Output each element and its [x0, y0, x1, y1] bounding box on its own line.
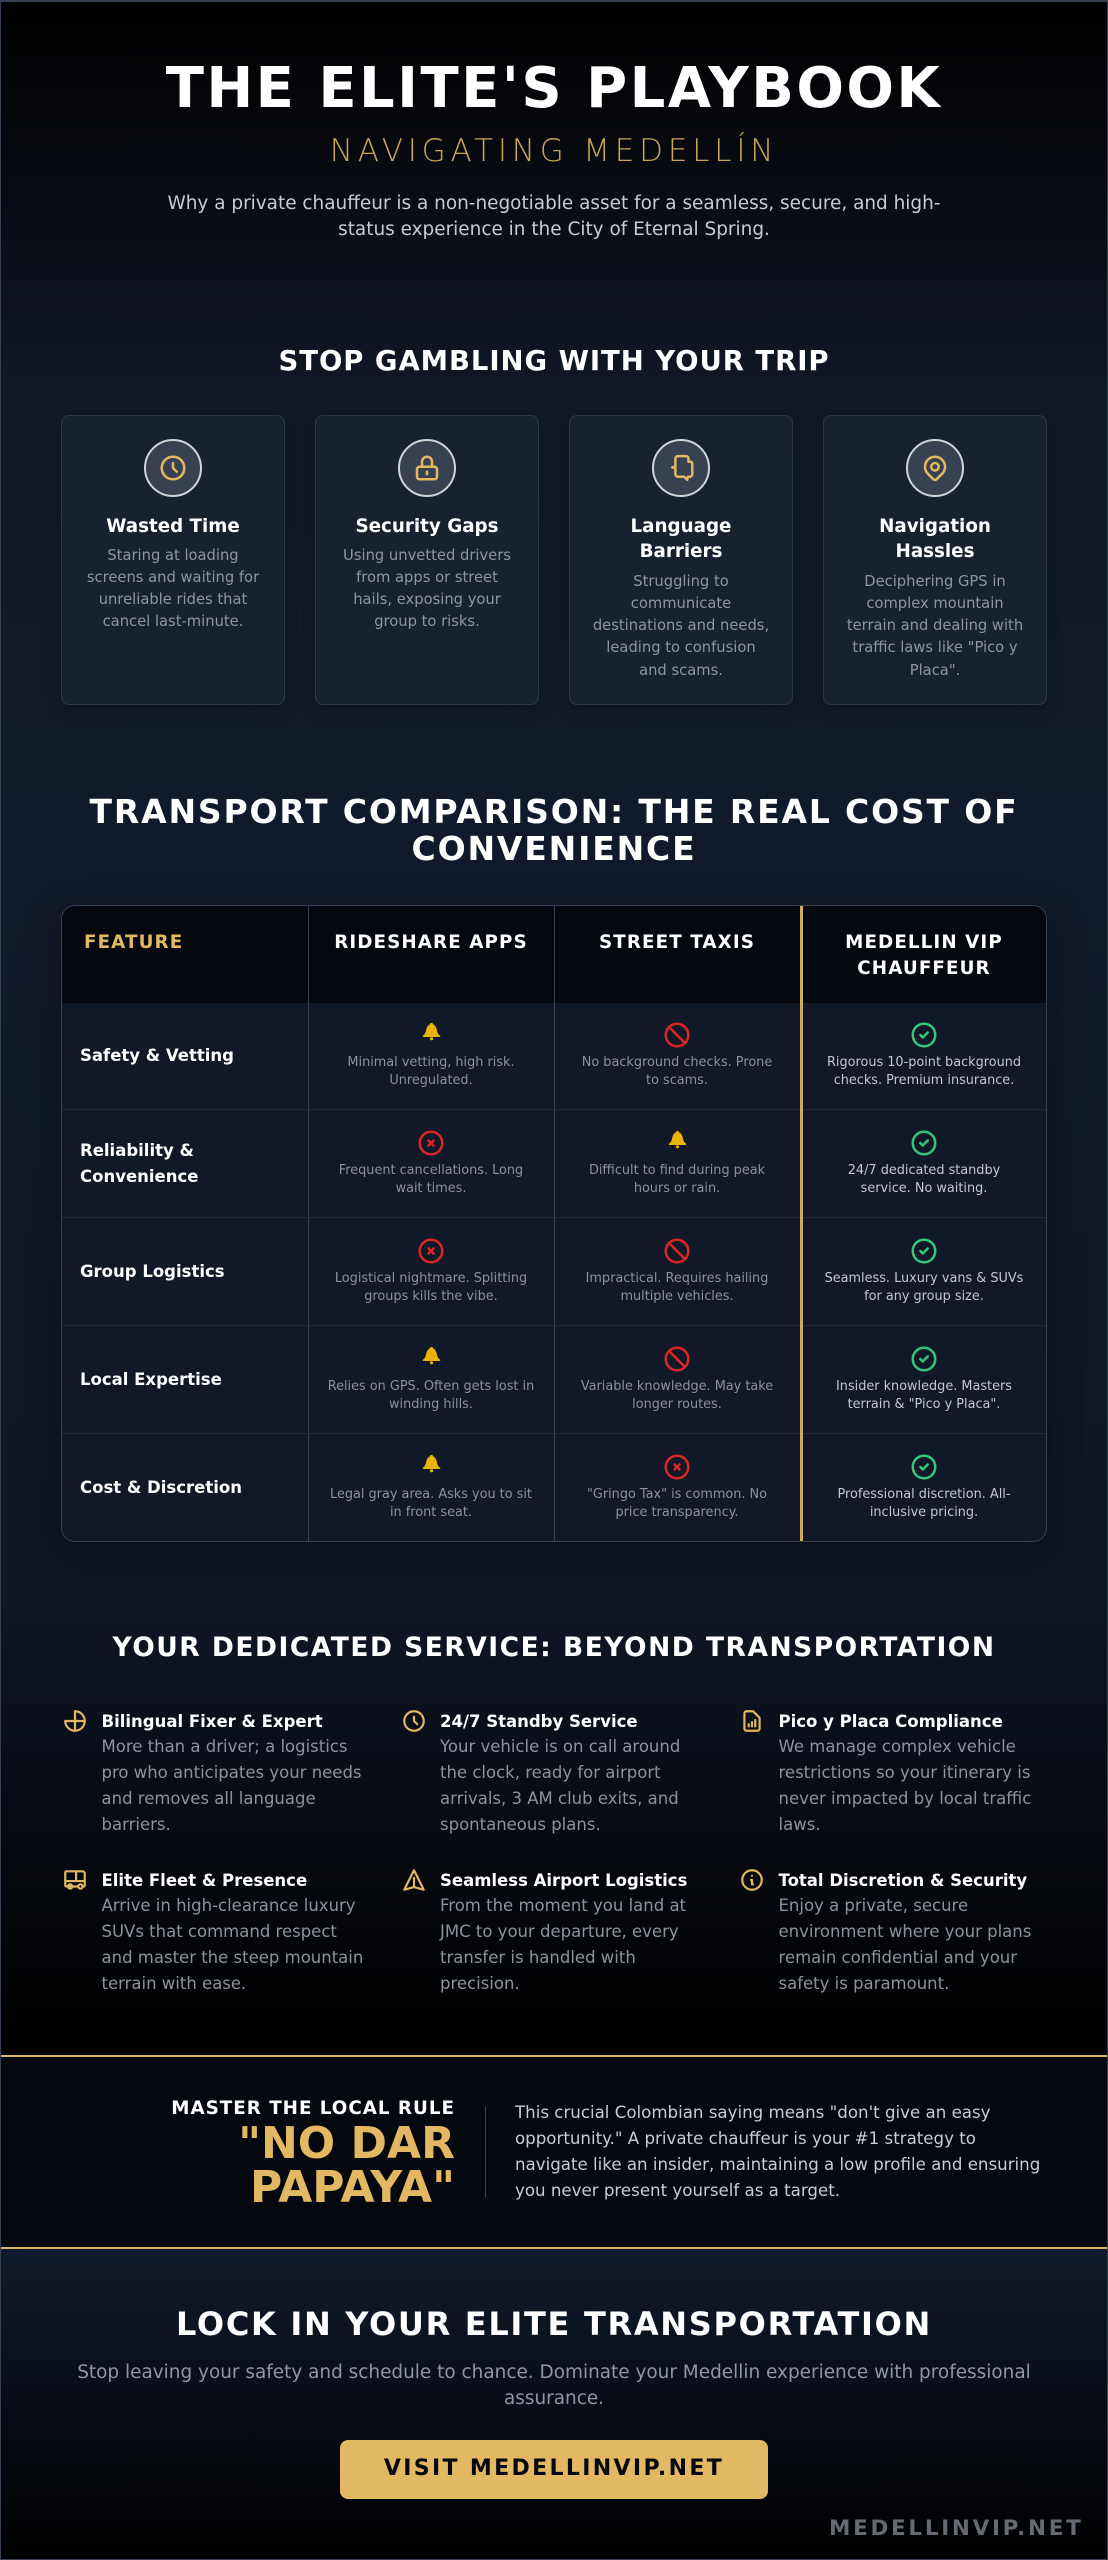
subtitle: NAVIGATING MEDELLÍN — [330, 132, 778, 168]
watermark: MEDELLINVIP.NET — [829, 2516, 1084, 2541]
cell: hours or rain. — [634, 1181, 720, 1196]
cta button: VISIT MEDELLINVIP.NET — [384, 2456, 724, 2481]
cell: Variable knowledge. May take — [581, 1379, 773, 1394]
card text: traffic laws like "Pico y — [852, 639, 1018, 656]
cell: checks. Premium insurance. — [834, 1073, 1014, 1088]
service: airport: JMC to your departure, every — [440, 1922, 679, 1941]
cell: Professional discretion. All- — [838, 1487, 1010, 1502]
cell: Logistical nightmare. Splitting — [335, 1271, 527, 1286]
cell: Insider knowledge. Masters — [836, 1379, 1012, 1394]
cell: multiple vehicles. — [620, 1289, 734, 1304]
cell: winding hills. — [389, 1397, 473, 1412]
service: pico y placa: Pico y Placa Compliance — [778, 1712, 1003, 1731]
service: airport: transfer is handled with — [440, 1948, 636, 1967]
cell: longer routes. — [632, 1397, 722, 1412]
header: vip: CHAUFFEUR — [857, 958, 991, 979]
card text: screens and waiting for — [87, 569, 259, 586]
service: standby — [403, 1710, 680, 1834]
cell — [582, 1022, 772, 1088]
row label: local expertise: Local Expertise — [80, 1370, 222, 1388]
service: standby: the clock, ready for airport — [440, 1763, 661, 1782]
row label: reliability: Reliability & — [80, 1140, 194, 1160]
cell: Unregulated. — [389, 1073, 473, 1088]
panel: language barriers — [569, 415, 793, 705]
intro text — [168, 193, 940, 240]
cell: for any group size. — [864, 1289, 984, 1304]
cell: Relies on GPS. Often gets lost in — [328, 1379, 534, 1394]
service: pico y placa: never impacted by local traffic — [778, 1789, 1031, 1808]
heading: transport comparison — [90, 792, 1018, 868]
cta text: Stop leaving your safety and schedule to chance. Dominate your Medellin experience with professional — [77, 2362, 1031, 2383]
panel: local rule callout — [0, 2055, 1108, 2249]
cell: Legal gray area. Asks you to sit — [330, 1487, 532, 1502]
callout text: This crucial Colombian saying means "don't give an easy — [515, 2103, 991, 2122]
callout headline: PAPAYA" — [250, 2162, 455, 2212]
card text — [847, 573, 1023, 679]
card text: Placa". — [910, 662, 960, 679]
row label: reliability: Convenience — [80, 1166, 198, 1186]
heading: dedicated service: YOUR DEDICATED SERVICE: BEYOND TRANSPORTATION — [112, 1632, 996, 1663]
callout text: you never present yourself as a target. — [515, 2181, 840, 2200]
cta button — [340, 2440, 768, 2499]
card text: terrain and dealing with — [847, 617, 1023, 634]
card title: Barriers — [640, 541, 722, 562]
cell — [589, 1131, 765, 1196]
service: standby: arrivals, 3 AM club exits, and — [440, 1789, 679, 1808]
service: airport — [403, 1869, 687, 1993]
header: vip: MEDELLIN VIP — [845, 932, 1003, 953]
cta text — [0, 2360, 1108, 2412]
card text: and scams. — [639, 662, 723, 679]
header: feature: FEATURE — [84, 932, 183, 953]
header: vip — [845, 932, 1003, 979]
card title: Wasted Time — [106, 516, 240, 536]
service: discretion: Enjoy a private, secure — [778, 1896, 968, 1915]
service: airport: precision. — [440, 1974, 520, 1993]
title: THE ELITE'S PLAYBOOK — [166, 56, 942, 120]
comparison table — [61, 905, 1047, 1542]
cell: price transparency. — [615, 1505, 739, 1520]
panel: call to action — [0, 2249, 1108, 2560]
card text: complex mountain — [866, 595, 1004, 612]
icon: clock — [403, 1710, 425, 1732]
row label: cost: Cost & Discretion — [80, 1478, 242, 1496]
card text: cancel last-minute. — [103, 613, 243, 630]
cell — [825, 1238, 1023, 1304]
card text: Deciphering GPS in — [864, 573, 1006, 590]
service: discretion: Total Discretion & Security — [778, 1871, 1027, 1890]
cell: to scams. — [646, 1073, 708, 1088]
cell — [848, 1130, 1000, 1196]
panel: navigation hassles — [823, 415, 1047, 705]
service: discretion: safety is paramount. — [778, 1974, 949, 1993]
card text — [343, 547, 511, 630]
service: discretion: remain confidential and your — [778, 1948, 1017, 1967]
callout text — [514, 2103, 1040, 2200]
icon: lock — [398, 439, 456, 497]
card text: group to risks. — [374, 613, 480, 630]
service: standby: Your vehicle is on call around — [440, 1737, 680, 1756]
card text: from apps or street — [356, 569, 498, 586]
service: airport: Seamless Airport Logistics — [440, 1871, 687, 1890]
callout divider — [485, 2107, 486, 2197]
icon: globe quadrants — [64, 1710, 86, 1732]
cell: "Gringo Tax" is common. No — [587, 1487, 767, 1502]
grid lines — [62, 906, 1046, 1541]
cell: groups kills the vibe. — [364, 1289, 498, 1304]
card text: Using unvetted drivers — [343, 547, 511, 564]
cell — [586, 1238, 768, 1304]
icon: location pin — [906, 439, 964, 497]
cell — [836, 1346, 1012, 1412]
cell: terrain & "Pico y Placa". — [848, 1397, 1000, 1412]
heading: transport comparison: TRANSPORT COMPARISON: THE REAL COST OF — [90, 792, 1018, 831]
card title: Language — [631, 516, 731, 536]
card title: Security Gaps — [355, 516, 499, 536]
service: standby: 24/7 Standby Service — [440, 1712, 638, 1731]
cell — [587, 1454, 767, 1520]
cell — [330, 1455, 532, 1520]
service: pico y placa: restrictions so your itinerary is — [778, 1763, 1030, 1782]
service: discretion — [741, 1869, 1031, 1993]
card title — [631, 516, 731, 562]
icon: vehicle — [64, 1870, 86, 1890]
icon: warning triangle — [403, 1869, 425, 1891]
header: rideshare: RIDESHARE APPS — [334, 932, 528, 953]
card text: Struggling to — [633, 573, 729, 590]
cell — [335, 1238, 527, 1304]
service: bilingual: barriers. — [102, 1815, 171, 1834]
cell — [347, 1023, 515, 1088]
cell: Minimal vetting, high risk. — [347, 1055, 515, 1070]
card text: leading to confusion — [606, 639, 756, 656]
cell: Difficult to find during peak — [589, 1163, 765, 1178]
cell: 24/7 dedicated standby — [848, 1163, 1000, 1178]
service: fleet — [64, 1870, 363, 1993]
intro text: status experience in the City of Eternal Spring. — [338, 219, 770, 240]
service: pico y placa: laws. — [778, 1815, 821, 1834]
icon: document chart — [743, 1710, 761, 1732]
cell: Frequent cancellations. Long — [339, 1163, 523, 1178]
callout kicker: MASTER THE LOCAL RULE — [171, 2098, 455, 2119]
service: fleet: Elite Fleet & Presence — [102, 1871, 307, 1890]
cell — [339, 1130, 523, 1196]
cell — [328, 1347, 534, 1412]
service: fleet: Arrive in high-clearance luxury — [102, 1896, 356, 1915]
service: fleet: terrain with ease. — [102, 1974, 246, 1993]
service: airport: From the moment you land at — [440, 1896, 686, 1915]
card text — [593, 573, 769, 679]
callout headline: "NO DAR — [238, 2118, 455, 2169]
panel: security gaps — [315, 415, 539, 705]
cell — [581, 1346, 773, 1412]
card title — [879, 516, 991, 562]
card text: communicate — [631, 595, 731, 612]
callout text: opportunity." A private chauffeur is your #1 strategy to — [515, 2129, 976, 2148]
heading: transport comparison: CONVENIENCE — [412, 829, 696, 868]
service: bilingual — [64, 1710, 362, 1834]
cta heading: LOCK IN YOUR ELITE TRANSPORTATION — [176, 2305, 932, 2343]
intro text: Why a private chauffeur is a non-negotiable asset for a seamless, secure, and high- — [168, 193, 940, 214]
cell: Seamless. Luxury vans & SUVs — [825, 1271, 1023, 1286]
card text: unreliable rides that — [99, 591, 247, 608]
service: pico y placa: We manage complex vehicle — [778, 1737, 1016, 1756]
cell: inclusive pricing. — [870, 1505, 978, 1520]
table header — [62, 906, 1046, 1003]
service: bilingual: Bilingual Fixer & Expert — [102, 1712, 323, 1731]
row label: reliability — [80, 1140, 198, 1186]
cell: in front seat. — [390, 1505, 472, 1520]
service: fleet: and master the steep mountain — [102, 1948, 363, 1967]
cta text: assurance. — [504, 2388, 604, 2409]
icon: info — [741, 1869, 763, 1891]
service: fleet: SUVs that command respect — [102, 1922, 337, 1941]
card text — [87, 547, 260, 630]
heading: stop gambling: STOP GAMBLING WITH YOUR TRIP — [278, 345, 830, 377]
header: taxis: STREET TAXIS — [599, 932, 755, 953]
cell: Impractical. Requires hailing — [586, 1271, 768, 1286]
cell — [827, 1022, 1021, 1088]
cell: service. No waiting. — [861, 1181, 987, 1196]
card title: Hassles — [896, 541, 974, 562]
service: discretion: environment where your plans — [778, 1922, 1031, 1941]
service: standby: spontaneous plans. — [440, 1815, 601, 1834]
callout text: navigate like an insider, maintaining a low profile and ensuring — [515, 2155, 1040, 2174]
cell: wait times. — [396, 1181, 466, 1196]
row label: safety: Safety & Vetting — [80, 1046, 234, 1064]
card title: Navigation — [879, 516, 991, 536]
service: bilingual: More than a driver; a logistics — [102, 1737, 348, 1756]
card text: destinations and needs, — [593, 617, 769, 634]
icon: clock — [144, 439, 202, 497]
card text: hails, exposing your — [353, 591, 501, 608]
service: pico y placa — [743, 1710, 1031, 1834]
cell: No background checks. Prone — [582, 1055, 772, 1070]
service: bilingual: pro who anticipates your needs — [102, 1763, 362, 1782]
card text: Staring at loading — [107, 547, 239, 564]
panel: wasted time — [61, 415, 285, 705]
cell — [838, 1454, 1010, 1520]
callout headline — [238, 2118, 455, 2212]
icon: speech bubble — [652, 439, 710, 497]
cell: Rigorous 10-point background — [827, 1055, 1021, 1070]
row label: group logistics: Group Logistics — [80, 1262, 225, 1280]
service: bilingual: and removes all language — [102, 1789, 316, 1808]
